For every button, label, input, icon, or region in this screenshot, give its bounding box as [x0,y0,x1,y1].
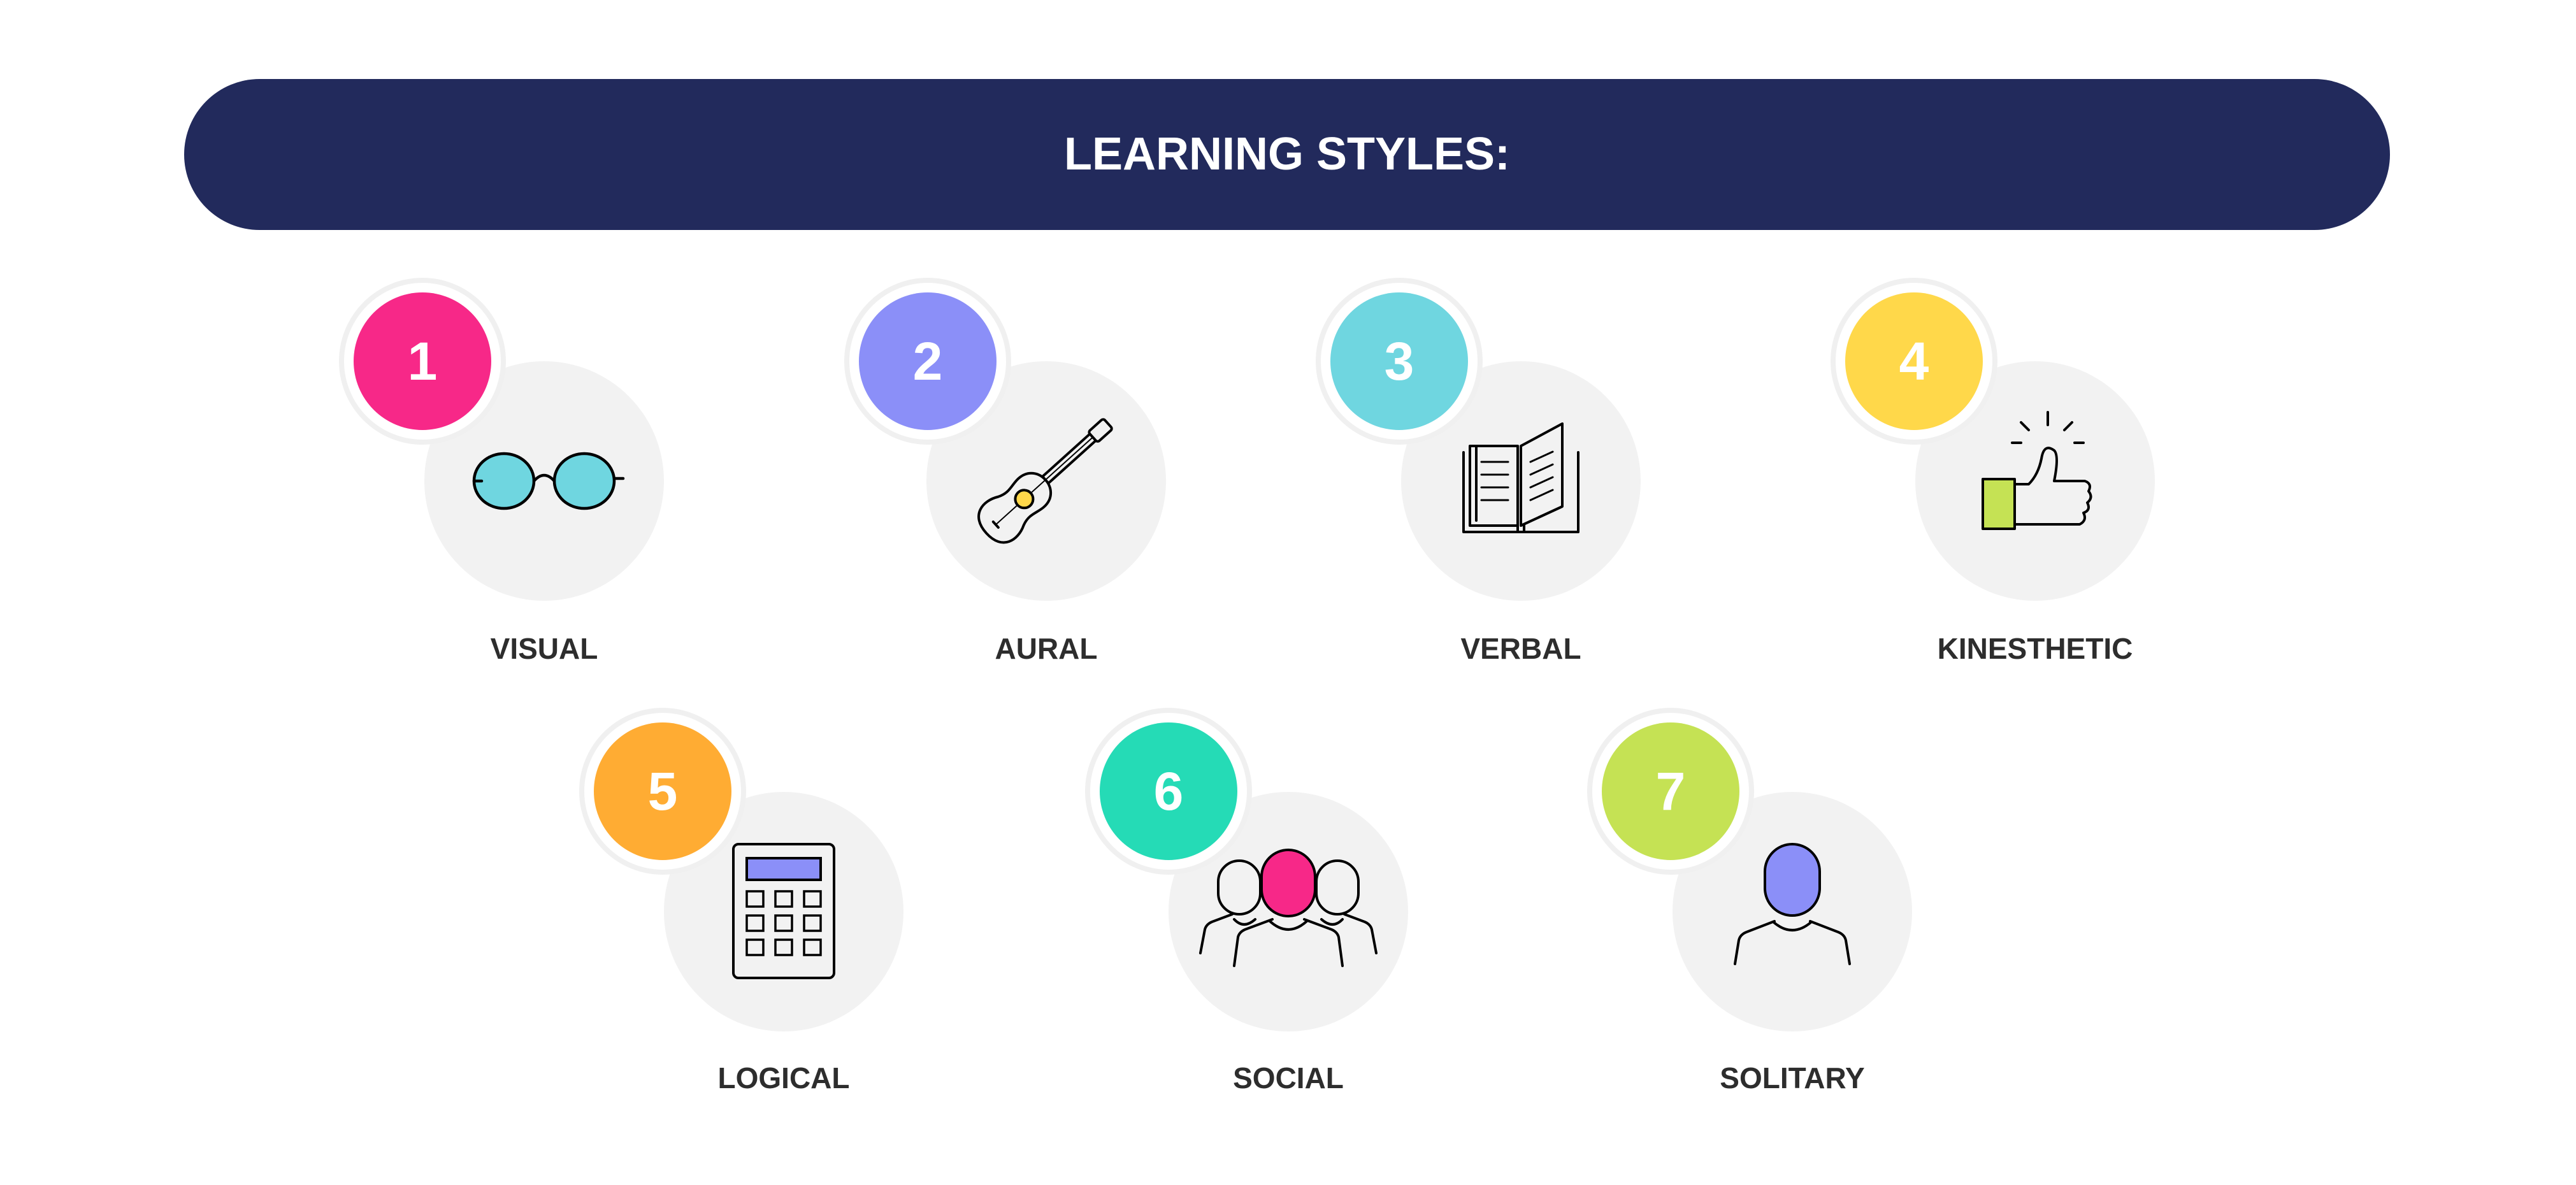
item 1: visual: 1 [408,331,437,391]
item 1: visual: VISUAL [491,632,598,665]
item 4: kinesthetic: 4 [1899,331,1929,391]
item 5: logical: 5 [648,761,677,821]
item 5: logical [582,710,903,1095]
item 3: verbal: VERBAL [1460,632,1581,665]
item 6: social: SOCIAL [1233,1061,1344,1095]
item 2: aural: AURAL [995,632,1097,665]
title banner: LEARNING STYLES: [1064,129,1510,180]
icon: open book [1464,424,1578,532]
icon: single person [1735,844,1850,964]
item 7: solitary: 7 [1656,761,1685,821]
item 2: aural [847,280,1166,665]
icon: guitar [971,406,1123,550]
icon: thumbs up [1983,412,2091,529]
item 4: kinesthetic [1833,280,2155,665]
item 6: social: 6 [1154,761,1183,821]
item 6: social [1088,710,1408,1095]
item 5: logical: LOGICAL [718,1061,849,1095]
icon: glasses [474,454,623,508]
title banner [184,79,2390,230]
item 7: solitary: SOLITARY [1720,1061,1865,1095]
item 3: verbal [1318,280,1641,665]
item 2: aural: 2 [913,331,942,391]
icon: calculator [733,844,834,978]
item 4: kinesthetic: KINESTHETIC [1938,632,2133,665]
item 3: verbal: 3 [1385,331,1414,391]
icon: group of people [1200,850,1376,966]
item 1: visual [342,280,664,665]
item 7: solitary [1590,710,1912,1095]
